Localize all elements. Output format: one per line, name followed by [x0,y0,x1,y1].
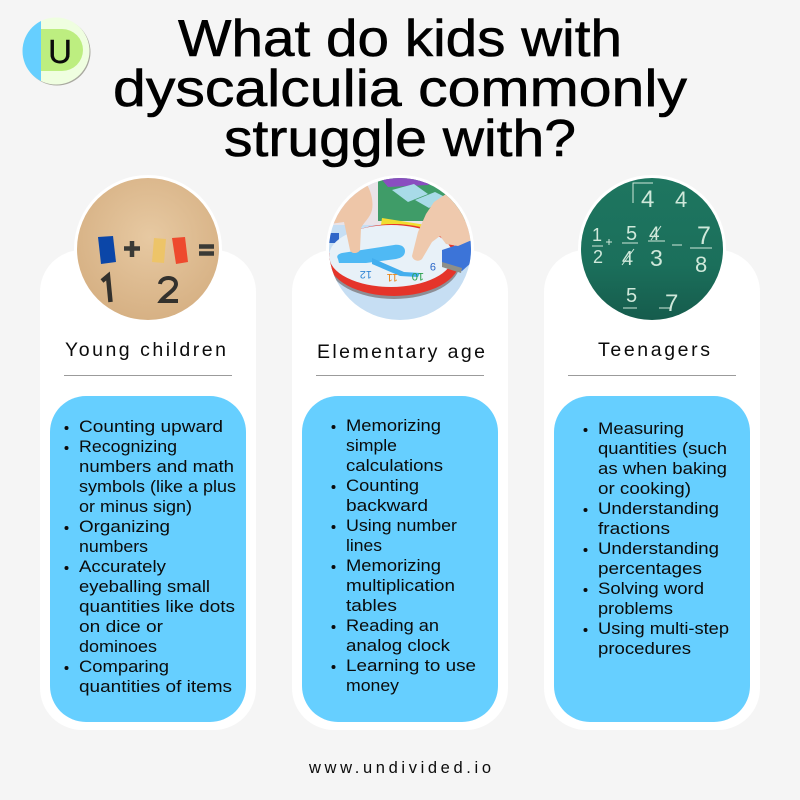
bullet list: Learning to use [346,656,476,675]
title: dyscalculia commonly [113,60,687,118]
bullet list: numbers and math [79,457,234,476]
photo: fractions on chalkboard: 7 [665,290,678,317]
bullet list: calculations [346,456,443,475]
bullet list: money [346,676,400,695]
logo: U [48,33,72,70]
logo [22,18,90,86]
heading: Teenagers [598,339,710,361]
bullet list: percentages [598,559,702,578]
panel: young children [40,170,256,730]
bullet list: Memorizing [346,416,441,435]
panel: elementary age [292,175,508,730]
footer website: www.undivided.io [308,759,491,777]
heading: Elementary age [317,341,485,363]
bullet list: Counting [346,476,419,495]
bullet list: multiplication [346,576,455,595]
bullet list: procedures [598,639,691,658]
photo: fractions on chalkboard: 7 [697,222,711,250]
photo: fractions on chalkboard: 4 [641,186,654,213]
bullet list: analog clock [346,636,451,655]
bullet list: Solving word [598,579,704,598]
bullet list: Reading an [346,616,439,635]
bullet list: quantities of items [79,677,232,696]
bullet list: symbols (like a plus [79,477,236,496]
photo: child's hands on toy clock: 12 [360,268,372,280]
bullet list: tables [346,596,397,615]
heading: Young children [65,339,226,361]
title: struggle with? [224,110,576,168]
bullet list: eyeballing small [79,577,210,596]
bullet list: backward [346,496,428,515]
bullet list: simple [346,436,397,455]
photo: fractions on chalkboard: 4 [622,248,633,270]
title: What do kids with [178,10,622,68]
bullet list: fractions [598,519,670,538]
bullet list: or minus sign) [79,497,192,516]
list panel [554,396,750,722]
photo: child's hands on toy clock [325,175,478,325]
bullet list: on dice or [79,617,163,636]
photo: fractions on chalkboard: 4 [675,187,687,212]
card background [544,250,760,730]
bullet list: quantities like dots [79,597,235,616]
bullet list: Accurately [79,557,167,576]
photo: fractions on chalkboard: 5 [626,285,637,307]
bullet list: Measuring [598,419,684,438]
bullet list: problems [598,599,673,618]
photo: fractions on chalkboard: 5 [626,223,637,245]
panel: teenagers [544,175,760,730]
photo: fractions on chalkboard: 3 [650,245,663,271]
bullet list [584,419,729,658]
bullet list: Organizing [79,517,170,536]
photo: fractions on chalkboard: 4 [649,224,660,245]
photo: fractions on chalkboard: 2 [593,247,603,267]
photo: fractions on chalkboard: 8 [695,252,707,277]
photo: blocks math on sand background [74,175,222,320]
bullet list: as when baking [598,459,727,478]
bullet list: Counting upward [79,417,223,436]
card background [292,250,508,730]
title [113,10,687,168]
bullet list: Comparing [79,657,169,676]
bullet list: or cooking) [598,479,691,498]
bullet list: Memorizing [346,556,441,575]
photo: child's hands on toy clock: 10 [412,270,424,282]
photo: fractions on chalkboard: 1 [592,225,602,245]
photo: child's hands on toy clock: 9 [430,260,436,272]
bullet list: numbers [79,537,148,556]
bullet list: Understanding [598,539,719,558]
bullet list: Using number [346,516,457,535]
bullet list: Understanding [598,499,719,518]
photo: child's hands on toy clock: 11 [387,271,398,283]
list panel [302,396,498,722]
bullet list: Using multi-step [598,619,729,638]
bullet list [64,417,236,696]
bullet list [332,416,476,695]
bullet list: dominoes [79,637,157,656]
list panel [50,396,246,722]
bullet list: Recognizing [79,437,177,456]
photo: fractions on chalkboard [575,175,730,325]
bullet list: lines [346,536,382,555]
bullet list: quantities (such [598,439,727,458]
card background [40,250,256,730]
